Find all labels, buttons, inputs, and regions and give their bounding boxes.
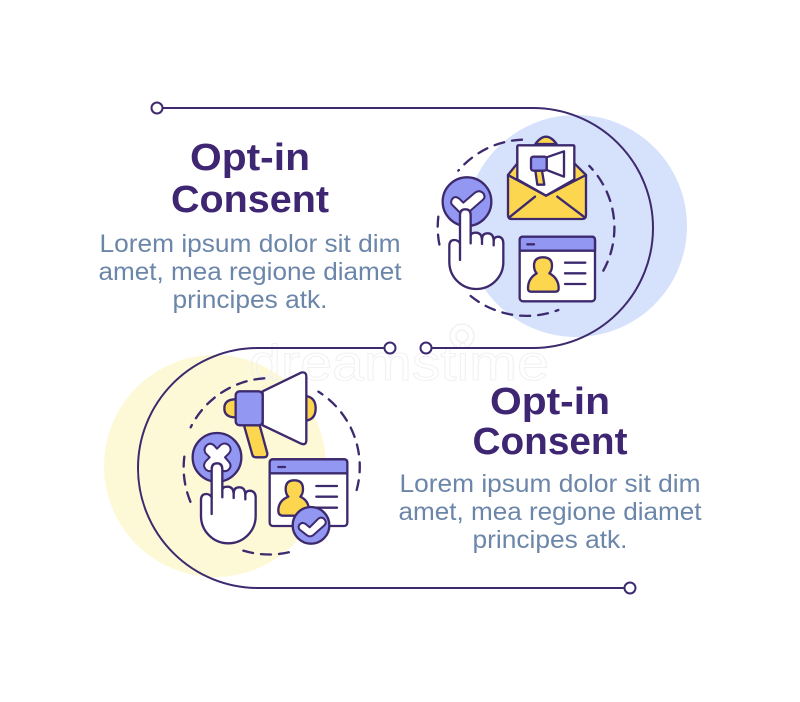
background circle: yellow: [104, 355, 326, 577]
watermark: dreamstime: [249, 335, 549, 391]
text block: top: principes atk.: [172, 286, 328, 314]
icon group: bottom: [184, 372, 360, 555]
icon: profile card: [520, 237, 595, 301]
icon: megaphone: [224, 372, 316, 457]
heading: top: [171, 137, 329, 221]
icon group: top: [438, 137, 614, 316]
icon: cross button and hand: [193, 433, 256, 543]
text block: bottom: [398, 470, 702, 554]
text block: top: [98, 230, 402, 314]
heading: bottom: [472, 381, 628, 463]
icon: profile card with check: [270, 459, 347, 544]
dashed ring: [438, 140, 614, 316]
heading: bottom: Consent: [472, 421, 628, 463]
text block: bottom: amet, mea regione diamet: [398, 498, 702, 526]
heading: top: Consent: [171, 179, 329, 221]
background circle: blue: [465, 115, 687, 337]
text block: top: Lorem ipsum dolor sit dim: [100, 230, 400, 258]
text block: bottom: Lorem ipsum dolor sit dim: [400, 470, 700, 498]
text block: top: amet, mea regione diamet: [98, 258, 402, 286]
dashed ring: [184, 378, 360, 555]
text block: bottom: principes atk.: [472, 526, 628, 554]
icon: envelope: [508, 137, 586, 219]
heading: top: Opt-in: [190, 137, 310, 179]
connector line: bottom: [138, 342, 636, 594]
heading: bottom: Opt-in: [490, 381, 610, 423]
connector line: top: [152, 102, 653, 354]
icon: check button and hand: [443, 177, 503, 289]
